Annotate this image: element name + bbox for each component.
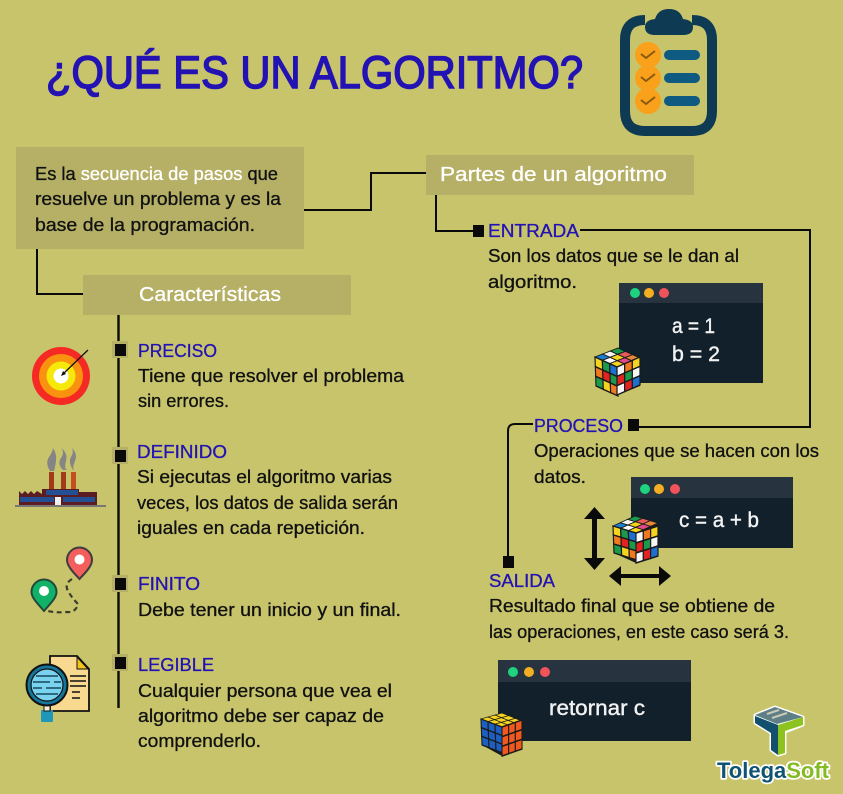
text: definido: DEFINIDO xyxy=(137,442,227,462)
text: entrada: ENTRADA xyxy=(488,221,579,241)
icon: map pins route xyxy=(32,548,92,612)
text: finito: Debe tener un inicio y un final. xyxy=(138,600,401,620)
text: entrada: algoritmo. xyxy=(488,272,577,292)
panel: definition: resuelve un problema y es la xyxy=(35,189,282,209)
code window: salida: retornar c xyxy=(549,697,645,720)
logo: TolegaSoft xyxy=(717,707,830,783)
text: proceso: Operaciones que se hacen con los xyxy=(534,441,819,461)
text: entrada: Son los datos que se le dan al xyxy=(488,246,739,266)
panel: partes heading xyxy=(426,155,694,195)
text: legible: algoritmo debe ser capaz de xyxy=(138,706,384,726)
panel: partes heading: Partes de un algoritmo xyxy=(440,164,667,186)
text: salida: SALIDA xyxy=(489,571,555,591)
logo: TolegaSoft: TolegaSoft xyxy=(717,758,830,783)
text: preciso: sin errores. xyxy=(138,391,229,411)
code window: entrada: b = 2 xyxy=(672,343,720,366)
icon: factory xyxy=(15,448,106,507)
text: definido: iguales en cada repetición. xyxy=(137,518,365,538)
text: salida: Resultado final que se obtiene de xyxy=(489,596,775,616)
text: proceso: datos. xyxy=(534,467,586,487)
panel: definition: Es la secuencia de pasos que xyxy=(35,164,278,184)
text: preciso: PRECISO xyxy=(138,341,217,361)
text: salida xyxy=(489,571,789,642)
text: legible: LEGIBLE xyxy=(138,655,214,675)
icon: rubik cube entrada xyxy=(595,348,640,396)
panel: características heading xyxy=(83,275,351,315)
text: entrada xyxy=(488,221,739,292)
icon: clipboard checklist xyxy=(625,9,712,131)
code window: entrada: a = 1 xyxy=(672,315,715,338)
text: legible xyxy=(138,655,392,751)
text: preciso xyxy=(138,341,405,411)
title: ¿QUÉ ES UN ALGORITMO? xyxy=(46,47,583,98)
text: salida: las operaciones, en este caso será 3. xyxy=(489,622,789,642)
icon: magnifier over document xyxy=(26,656,89,722)
arrow: vertical double xyxy=(584,507,605,570)
text: definido: Si ejecutas el algoritmo varias xyxy=(137,467,392,487)
text: finito: FINITO xyxy=(138,574,200,594)
text: finito xyxy=(138,574,401,620)
icon: target xyxy=(32,347,90,405)
panel: características heading: Características xyxy=(139,284,281,306)
code window: entrada xyxy=(619,283,763,383)
text: definido xyxy=(137,442,398,538)
node markers xyxy=(112,225,639,671)
icon: rubik cube salida xyxy=(481,713,522,756)
text: proceso: PROCESO xyxy=(534,416,623,436)
panel: definition: base de la programación. xyxy=(35,215,255,235)
code window: proceso xyxy=(631,477,793,548)
icon: rubik cube proceso xyxy=(613,516,658,563)
code window: salida xyxy=(498,660,691,741)
text: proceso xyxy=(534,416,819,487)
text: definido: veces, los datos de salida serán xyxy=(137,493,398,513)
text: preciso: Tiene que resolver el problema xyxy=(138,366,405,386)
arrow: horizontal double xyxy=(609,566,671,586)
code window: proceso: c = a + b xyxy=(679,509,759,532)
text: legible: comprenderlo. xyxy=(138,731,261,751)
panel: definition xyxy=(16,147,304,249)
connector lines xyxy=(37,173,810,708)
text: legible: Cualquier persona que vea el xyxy=(138,681,392,701)
